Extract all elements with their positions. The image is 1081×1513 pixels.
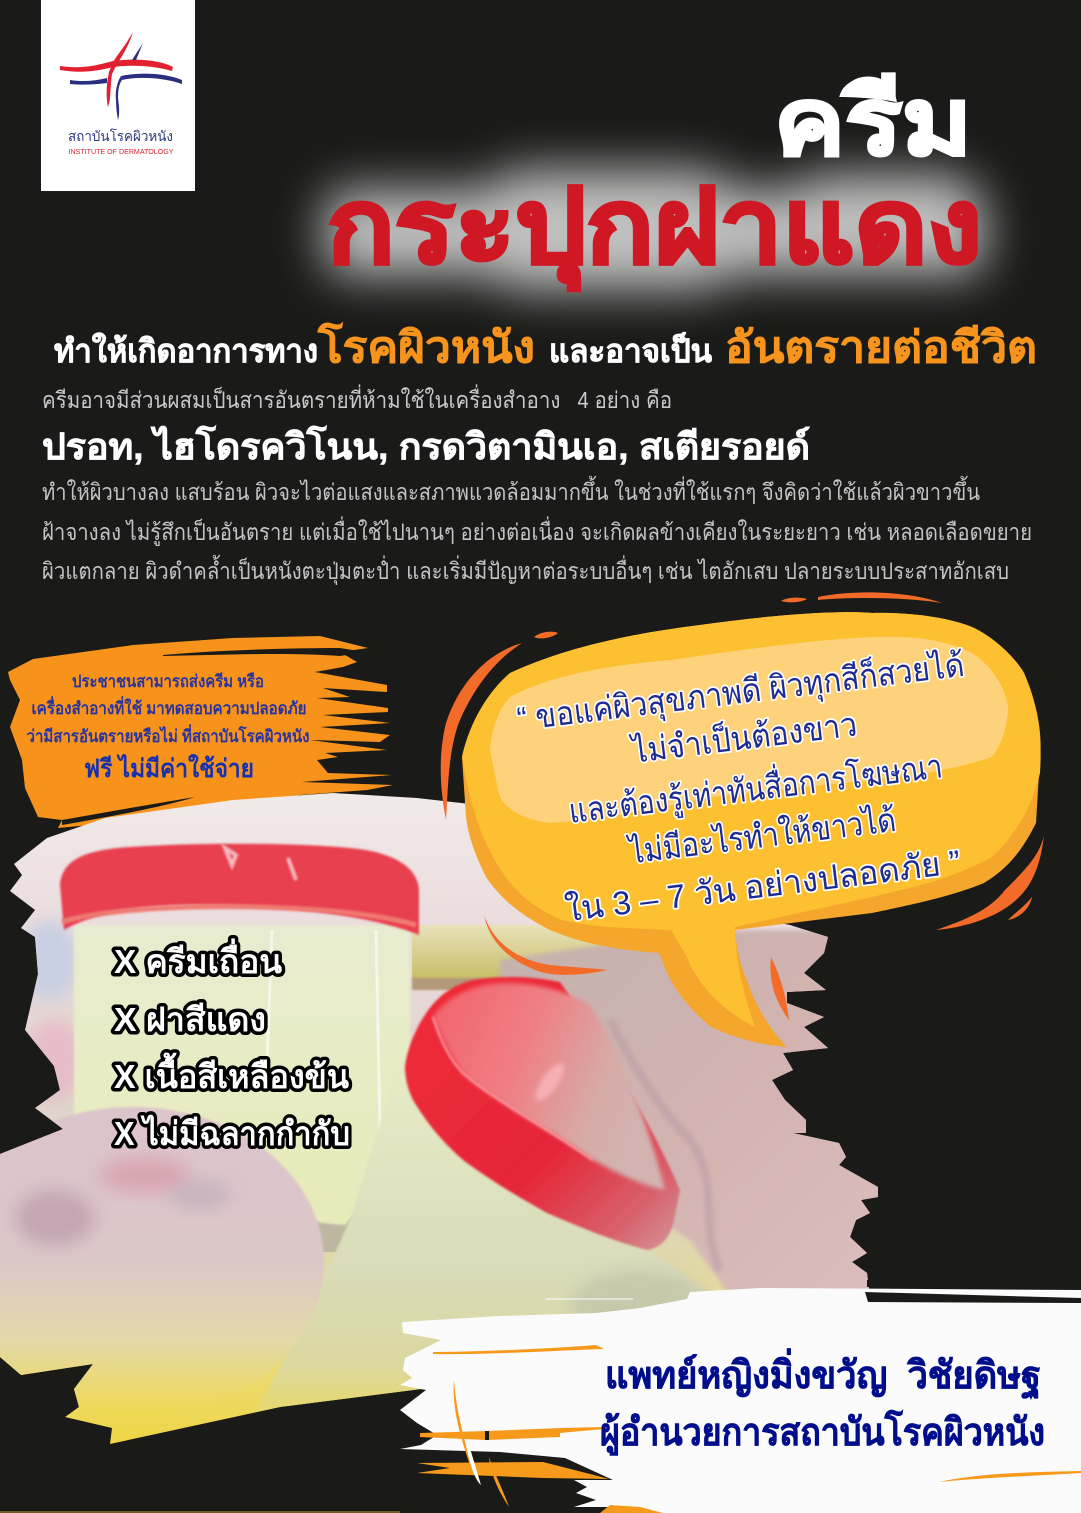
jar lid: tilted red	[405, 977, 680, 1250]
list: warning signs	[114, 938, 350, 1152]
quote text: และต้องรู้เท่าทันสื่อการโฆษณา	[566, 743, 945, 832]
panel: director	[400, 1280, 1081, 1513]
director name: แพทย์หญิงมิ่งขวัญ วิชัยดิษฐ	[605, 1348, 1041, 1400]
panel: logo	[41, 0, 195, 191]
text block: side effects	[42, 476, 1032, 585]
title line 1: ครีม	[774, 70, 972, 174]
brush shape	[8, 636, 393, 828]
callout text: ฟรี ไม่มีค่าใช้จ่าย	[84, 753, 254, 783]
list: warning signs: X ฝาสีแดง	[114, 1001, 266, 1038]
quote text: ใน 3 – 7 วัน อย่างปลอดภัย ”	[563, 843, 962, 928]
tint: left of jar	[22, 920, 78, 1000]
quote text: “ ขอแค่ผิวสุขภาพดี ผิวทุกสีก็สวยได้	[515, 645, 966, 739]
subtitle: โรคผิวหนัง	[317, 321, 535, 372]
subtitle: อันตรายต่อชีวิต	[725, 324, 1037, 372]
orange brush strokes	[417, 1345, 1081, 1513]
ledge behind jars	[318, 1220, 350, 1252]
text block: harmful ingredients: ครีมอาจมีส่วนผสมเป็นสารอันตรายที่ห้ามใช้ในเครื่องสำอาง 4 อย่าง คือ	[42, 384, 672, 413]
list: warning signs: X ไม่มีฉลากกำกับ	[114, 1114, 350, 1152]
callout: free test	[8, 636, 393, 828]
list: warning signs: X ครีมเถื่อน	[114, 938, 282, 980]
list: warning signs: X เนื้อสีเหลืองข้น	[114, 1052, 349, 1095]
text block: side effects: ทำให้ผิวบางลง แสบร้อน ผิวจะไวต่อแสงและสภาพแวดล้อมมากขึ้น ในช่วงที่ใช้แรกๆ จึงคิดว่าใช้แล้วผิวขาวขึ้น	[42, 476, 980, 505]
quote text: ไม่มีอะไรทำให้ขาวได้	[625, 801, 898, 871]
quote text	[515, 645, 966, 928]
jar: upright	[60, 844, 419, 1225]
logo name English: INSTITUTE OF DERMATOLOGY	[68, 147, 174, 156]
text block: harmful ingredients	[42, 384, 810, 467]
text block: harmful ingredients: ปรอท, ไฮโดรควิโนน, กรดวิตามินเอ, สเตียรอยด์	[42, 425, 810, 467]
quote text: ไม่จำเป็นต้องขาว	[627, 704, 859, 770]
title	[325, 70, 985, 291]
accent strokes	[441, 592, 1044, 1020]
subtitle: ทำให้เกิดอาการทาง	[54, 332, 318, 369]
bottom edge line	[0, 1511, 400, 1513]
white brush	[400, 1288, 1081, 1513]
callout text	[26, 671, 310, 783]
jar band behind	[412, 925, 602, 980]
subtitle: และอาจเป็น	[549, 331, 712, 369]
bubble body	[462, 612, 1041, 1027]
skin patch: right	[500, 930, 900, 1310]
bubble shadow	[462, 612, 1041, 1047]
title glow	[325, 170, 985, 290]
callout text: ว่ามีสารอันตรายหรือไม่ ที่สถาบันโรคผิวหนัง	[26, 724, 310, 746]
jar: tilted body	[254, 1096, 707, 1413]
pale bottom of tilted jar	[570, 1269, 704, 1314]
title line 2: กระปุกฝาแดง	[327, 169, 982, 291]
callout text: เครื่องสำอางที่ใช้ มาทดสอบความปลอดภัย	[32, 696, 306, 718]
logo name Thai: สถาบันโรคผิวหนัง	[68, 128, 173, 144]
subtitle	[54, 321, 1037, 372]
skin patch: bottom left	[0, 1107, 324, 1417]
icon: institute logo	[60, 32, 182, 120]
callout text: ประชาชนสามารถส่งครีม หรือ	[72, 671, 264, 691]
bubble highlight	[490, 637, 1008, 823]
speech bubble: quote	[441, 592, 1044, 1047]
photo: cream jars and skin	[0, 793, 878, 1444]
